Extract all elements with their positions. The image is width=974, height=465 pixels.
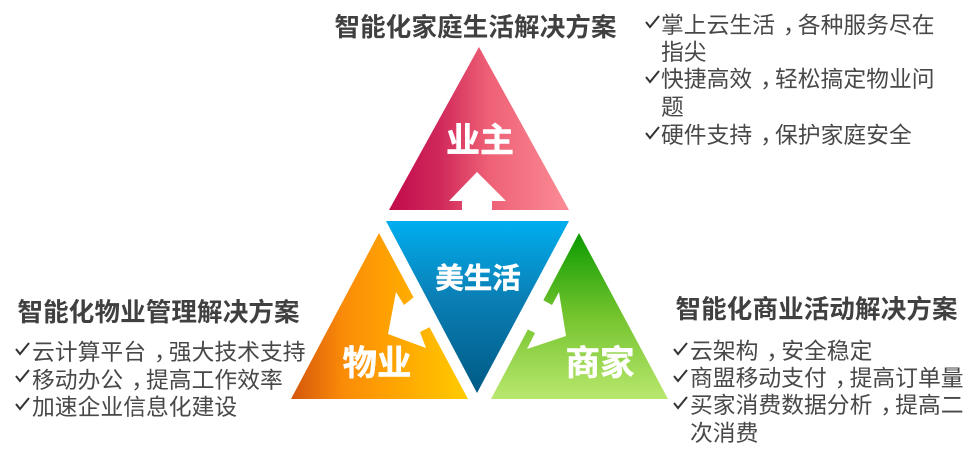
label: property: 物业 bbox=[342, 345, 412, 383]
list: owner benefits: 快捷高效 ，轻松搞定物业问 bbox=[661, 66, 935, 92]
list: merchant benefits: 商盟移动支付 ，提高订单量 bbox=[690, 365, 964, 391]
list: owner benefits: 掌上云生活 ，各种服务尽在 bbox=[661, 12, 935, 38]
list: merchant benefits: 买家消费数据分析 ，提高二 bbox=[690, 392, 964, 418]
list: merchant benefits bbox=[674, 338, 964, 446]
panel: centre triangle bbox=[386, 221, 569, 393]
list: owner benefits: 指尖 bbox=[661, 39, 707, 65]
list: owner benefits bbox=[646, 12, 935, 148]
label: beautiful life: 美生活 bbox=[435, 263, 521, 295]
panel: merchant triangle bbox=[491, 233, 668, 399]
panel: owner triangle bbox=[389, 47, 569, 211]
list: property benefits: 移动办公 ，提高工作效率 bbox=[32, 367, 283, 393]
list: property benefits: 云计算平台 ，强大技术支持 bbox=[32, 339, 306, 365]
list: owner benefits: 题 bbox=[661, 94, 684, 120]
heading: home solution: 智能化家庭生活解决方案 bbox=[334, 13, 617, 42]
list: property benefits: 加速企业信息化建设 bbox=[32, 394, 237, 420]
panel: property triangle bbox=[291, 233, 468, 399]
list: owner benefits: 硬件支持 ，保护家庭安全 bbox=[661, 122, 912, 148]
label: owner: 业主 bbox=[446, 122, 514, 160]
heading: property solution: 智能化物业管理解决方案 bbox=[18, 298, 300, 327]
list: merchant benefits: 次消费 bbox=[690, 420, 758, 446]
arrow: to property bbox=[388, 292, 430, 348]
arrow: up bbox=[449, 172, 506, 211]
list: property benefits bbox=[16, 339, 306, 420]
label: merchant: 商家 bbox=[566, 345, 634, 383]
list: merchant benefits: 云架构 ，安全稳定 bbox=[690, 338, 872, 364]
heading: commerce solution: 智能化商业活动解决方案 bbox=[676, 295, 958, 324]
arrow: to merchant bbox=[527, 292, 566, 349]
